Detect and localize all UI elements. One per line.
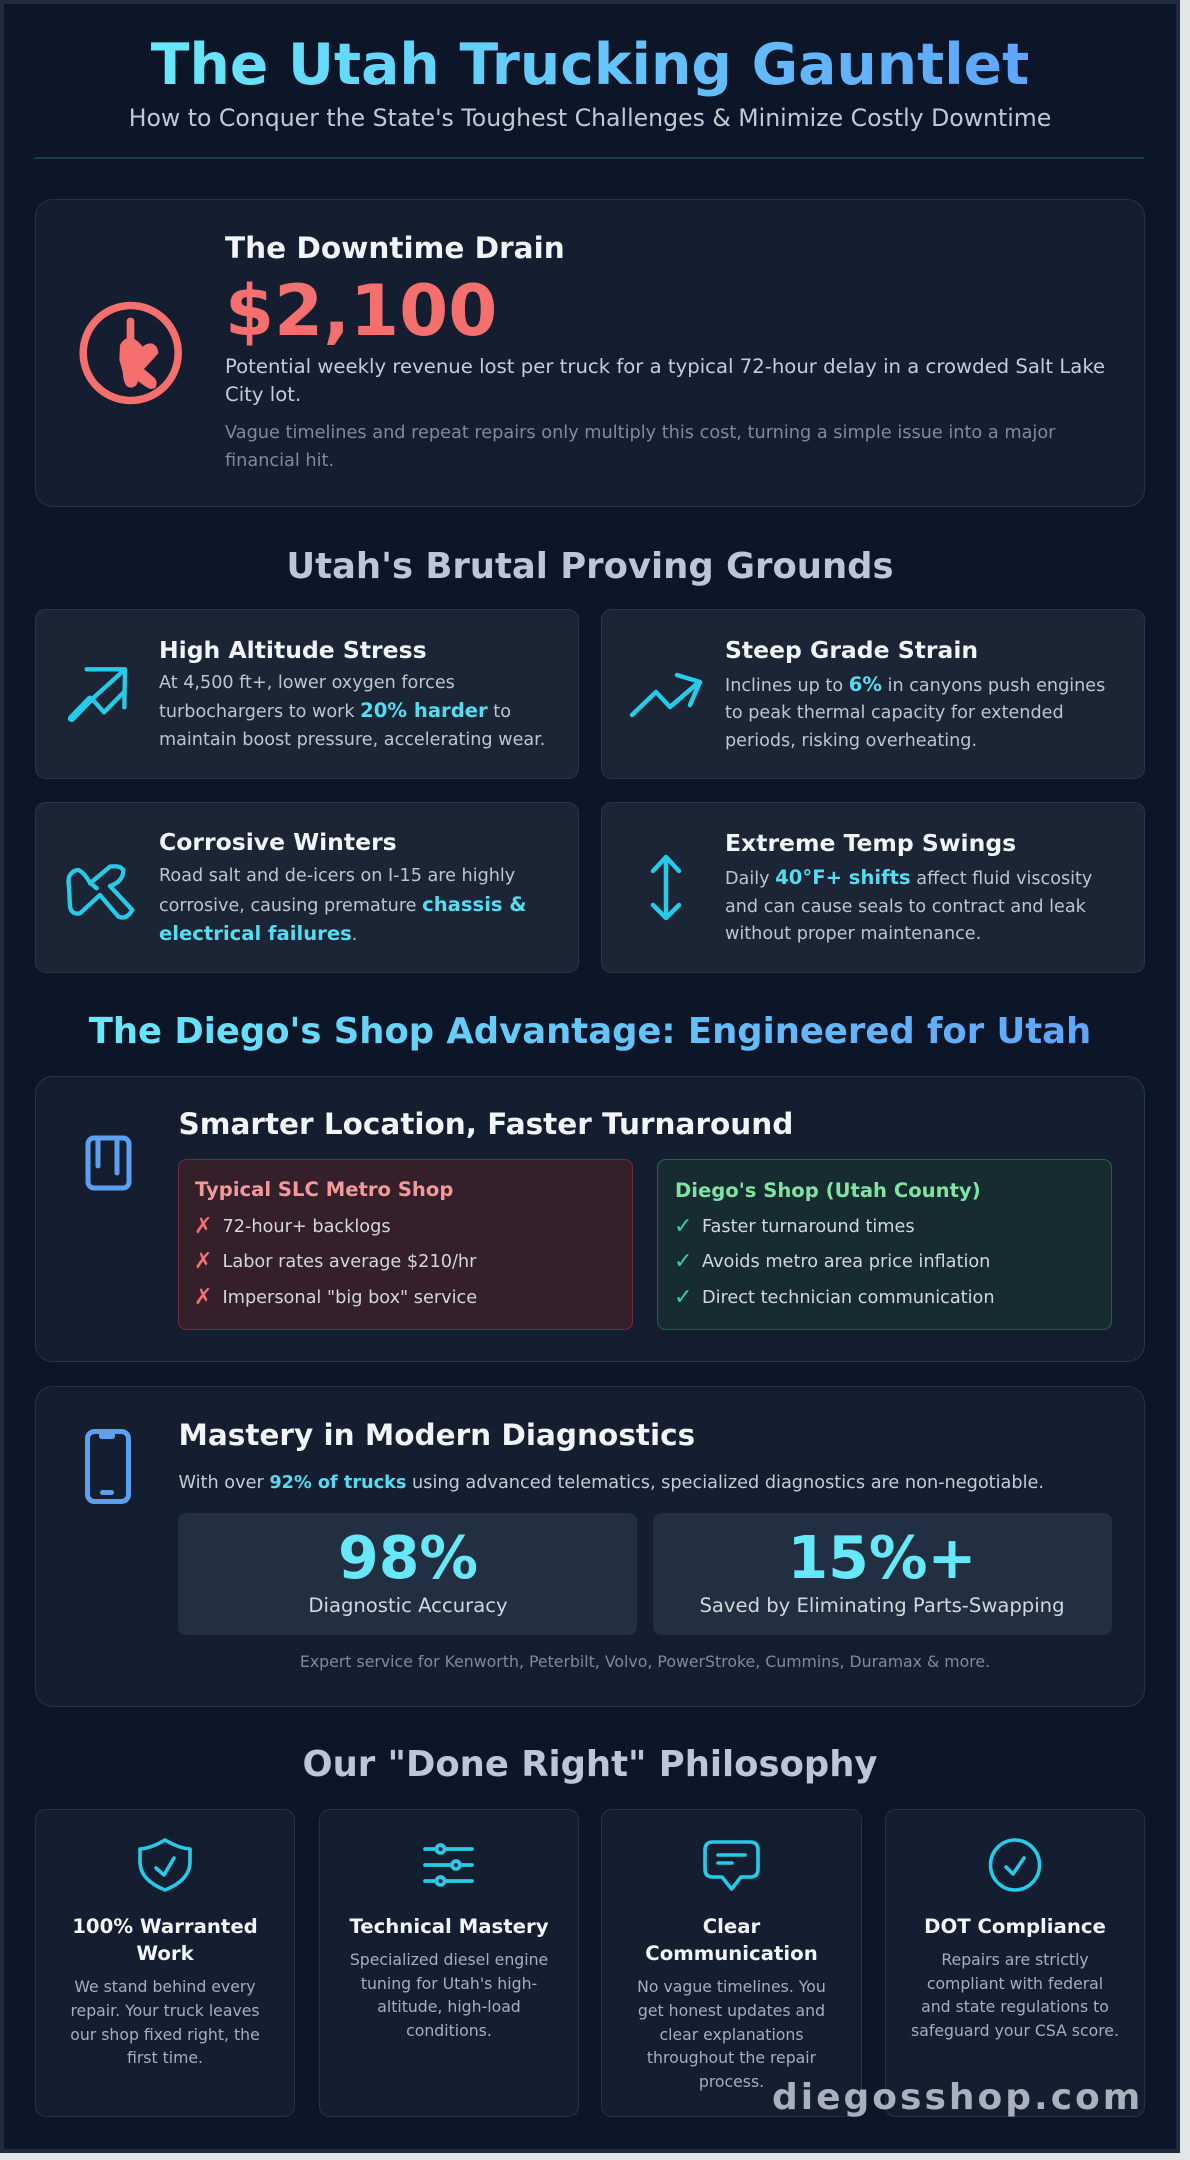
- subtitle: How to Conquer the State's Toughest Challenges & Minimize Costly Downtime: [129, 104, 1051, 132]
- description: [225, 355, 1105, 406]
- panel: clear communication: throughout the repair: [647, 2048, 817, 2067]
- note: Vague timelines and repeat repairs only multiply this cost, turning a simple issue into a major: [225, 423, 1056, 443]
- panel: DOT compliance: and state regulations to: [921, 1997, 1109, 2016]
- panel: DOT compliance: safeguard your CSA score.: [911, 2021, 1119, 2040]
- panel: smarter location: [36, 1076, 1144, 1362]
- icon: shield: [140, 1840, 190, 1890]
- title: The Utah Trucking Gauntlet: [151, 32, 1029, 98]
- panel: extreme temp swings: [602, 802, 1144, 972]
- panel: Diego's shop: Avoids metro area price inflation: [702, 1252, 990, 1272]
- panel: steep grade strain: Inclines up to 6% in canyons push engines: [725, 673, 1105, 696]
- panel: typical SLC shop: Labor rates average $210/hr: [222, 1252, 477, 1272]
- stat: diagnostic accuracy: [178, 1513, 637, 1635]
- stat: parts swapping savings: 15%+: [787, 1524, 977, 1592]
- panel: clear communication: clear explanations: [659, 2025, 804, 2044]
- panel: modern diagnostics: [36, 1386, 1144, 1706]
- panel: warranted work: Work: [136, 1942, 195, 1965]
- panel: warranted work: our shop fixed right, the: [70, 2025, 260, 2044]
- panel: clear communication: get honest updates and: [638, 2001, 825, 2020]
- panel: warranted work: repair. Your truck leaves: [70, 2001, 260, 2020]
- panel: steep grade strain: to peak thermal capacity for extended: [725, 703, 1064, 723]
- panel: extreme temp swings: Daily 40°F+ shifts affect fluid viscosity: [725, 866, 1092, 889]
- panel: clear communication: [602, 1810, 862, 2116]
- panel: extreme temp swings: and can cause seals to contract and leak: [725, 897, 1087, 917]
- panel: DOT compliance: DOT Compliance: [924, 1915, 1106, 1938]
- panel: warranted work: 100% Warranted: [72, 1915, 258, 1938]
- icon: up-down arrow: [653, 857, 679, 918]
- panel: high altitude stress: turbochargers to work 20% harder to: [159, 699, 511, 722]
- panel: steep grade strain: [602, 610, 1144, 778]
- panel: modern diagnostics: With over 92% of trucks using advanced telematics, specialized diagnostics are non-negotiable.: [178, 1473, 1044, 1493]
- icon: sliders: [425, 1845, 472, 1885]
- panel: corrosive winters: corrosive, causing premature chassis &: [159, 893, 526, 916]
- panel: modern diagnostics: Mastery in Modern Diagnostics: [178, 1418, 695, 1452]
- icon: check circle: [990, 1840, 1040, 1890]
- panel: Diego's shop: Diego's Shop (Utah County): [675, 1179, 981, 1202]
- panel: technical mastery: [320, 1810, 578, 2116]
- icon: chat bubble: [705, 1842, 758, 1889]
- panel: steep grade strain: periods, risking overheating.: [725, 731, 977, 751]
- note: financial hit.: [225, 451, 334, 471]
- panel: typical SLC shop: [178, 1160, 632, 1330]
- panel: extreme temp swings: without proper maintenance.: [725, 924, 981, 944]
- stat: diagnostic accuracy: Diagnostic Accuracy: [308, 1594, 508, 1617]
- panel: typical SLC shop: Typical SLC Metro Shop: [195, 1178, 453, 1201]
- panel: warranted work: [36, 1810, 294, 2116]
- panel: Diego's shop: Direct technician communication: [702, 1288, 995, 1308]
- description: City lot.: [225, 383, 301, 406]
- heading: philosophy: Our "Done Right" Philosophy: [303, 1744, 877, 1785]
- panel: technical mastery: Specialized diesel engine: [350, 1950, 548, 1969]
- panel: DOT compliance: Repairs are strictly: [941, 1950, 1089, 1969]
- note: [225, 423, 1056, 471]
- panel: DOT compliance: [886, 1810, 1144, 2116]
- watermark: diegosshop.com: [772, 2077, 1143, 2118]
- panel: warranted work: We stand behind every: [74, 1977, 256, 1996]
- panel: typical SLC shop: ✗: [194, 1285, 212, 1310]
- panel: technical mastery: conditions.: [406, 2021, 492, 2040]
- panel: typical SLC shop: ✗: [194, 1214, 212, 1239]
- panel: Diego's shop: Faster turnaround times: [702, 1217, 915, 1237]
- panel: high altitude stress: High Altitude Stress: [159, 636, 427, 664]
- panel: high altitude stress: At 4,500 ft+, lower oxygen forces: [159, 673, 455, 693]
- panel: warranted work: first time.: [127, 2048, 203, 2067]
- panel: DOT compliance: compliant with federal: [927, 1974, 1103, 1993]
- big number: $2,100: [225, 269, 497, 352]
- panel: corrosive winters: [36, 802, 578, 972]
- panel: Diego's shop: ✓: [674, 1214, 692, 1239]
- panel: corrosive winters: Corrosive Winters: [159, 828, 397, 856]
- panel: corrosive winters: electrical failures.: [159, 922, 357, 945]
- heading: advantage: The Diego's Shop Advantage: Engineered for Utah: [89, 1011, 1091, 1052]
- icon: phone: [88, 1431, 128, 1502]
- stat: parts swapping savings: Saved by Eliminating Parts-Swapping: [699, 1594, 1065, 1617]
- heading: proving grounds: Utah's Brutal Proving Grounds: [286, 546, 894, 587]
- stat: diagnostic accuracy: 98%: [338, 1524, 478, 1592]
- panel: Diego's shop: ✓: [674, 1249, 692, 1274]
- panel: typical SLC shop: ✗: [194, 1249, 212, 1274]
- panel: technical mastery: tuning for Utah's high-: [361, 1974, 537, 1993]
- heading: The Downtime Drain: [225, 231, 565, 265]
- description: Potential weekly revenue lost per truck for a typical 72-hour delay in a crowded Salt Lake: [225, 355, 1105, 378]
- panel: Diego's shop: ✓: [674, 1285, 692, 1310]
- panel: high altitude stress: maintain boost pressure, accelerating wear.: [159, 730, 545, 750]
- panel: clear communication: No vague timelines. You: [637, 1977, 826, 1996]
- panel: extreme temp swings: Extreme Temp Swings: [725, 829, 1016, 857]
- panel: downtime drain: [36, 200, 1144, 506]
- icon: location: [88, 1138, 129, 1188]
- icon: altitude arrow: [70, 669, 125, 719]
- panel: clear communication: process.: [699, 2072, 764, 2091]
- panel: Diego's shop: [658, 1160, 1112, 1330]
- panel: high altitude stress: [36, 610, 578, 778]
- icon: corrosion cross: [69, 866, 132, 917]
- panel: corrosive winters: Road salt and de-icers on I-15 are highly: [159, 866, 515, 886]
- stat: parts swapping savings: [653, 1513, 1112, 1635]
- panel: clear communication: Clear: [703, 1915, 761, 1938]
- panel: smarter location: Smarter Location, Faster Turnaround: [178, 1107, 793, 1141]
- panel: technical mastery: Technical Mastery: [349, 1915, 549, 1938]
- panel: steep grade strain: Steep Grade Strain: [725, 636, 978, 664]
- panel: clear communication: Communication: [645, 1942, 818, 1965]
- brands note: Expert service for Kenworth, Peterbilt, Volvo, PowerStroke, Cummins, Duramax & more.: [300, 1652, 990, 1671]
- icon: money drain: [83, 306, 178, 400]
- panel: typical SLC shop: 72-hour+ backlogs: [222, 1217, 391, 1237]
- panel: typical SLC shop: Impersonal "big box" service: [222, 1288, 477, 1308]
- icon: trending up: [632, 675, 700, 715]
- panel: technical mastery: altitude, high-load: [377, 1997, 521, 2016]
